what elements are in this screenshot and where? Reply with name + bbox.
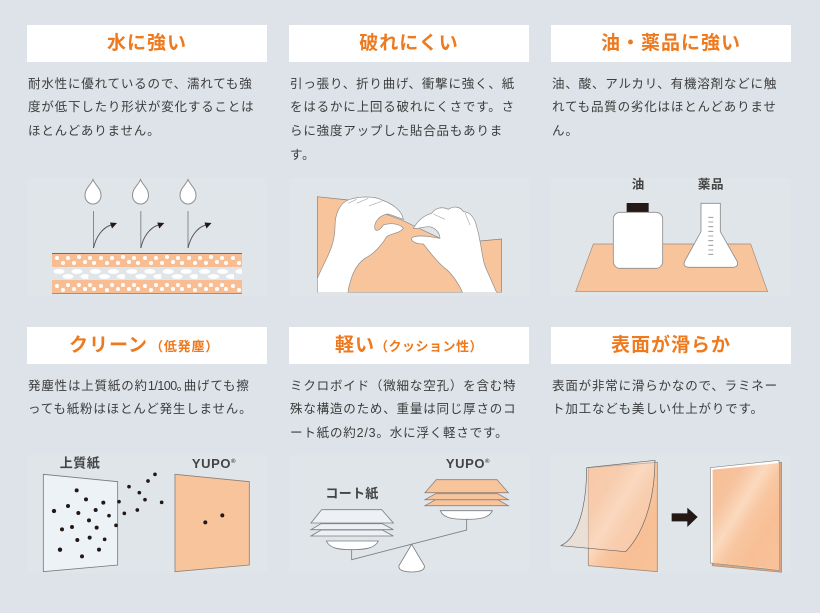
label: oil: 油 (632, 176, 644, 192)
heading: light (289, 327, 529, 364)
label: woodfree paper: 上質紙 (60, 456, 100, 470)
text: light: ミクロボイド（微細な空孔）を含む特 (290, 378, 516, 392)
text: clean: 発塵性は上質紙の約1/100。曲げても擦 (28, 378, 250, 392)
text: oil and chemical resistant: れても品質の劣化はほとんどありませ (552, 100, 777, 114)
heading: oil and chemical resistant (551, 25, 791, 62)
illustration: hands tearing sheet (317, 196, 502, 292)
label: coated paper: コート紙 (325, 486, 379, 501)
heading: tear resistant: 破れにくい (359, 33, 459, 54)
heading: water resistant (27, 25, 267, 62)
text: smooth surface: 表面が非常に滑らかなので、ラミネー (552, 378, 778, 392)
text: tear resistant: をはるかに上回る破れにくさです。さ (290, 100, 515, 114)
label: YUPO: YUPO (192, 456, 231, 471)
illustration: lamination before and after (551, 455, 791, 573)
finger creases (348, 198, 470, 225)
torn sheet (317, 197, 502, 292)
illustration: balance comparing coated paper and YUPO (289, 455, 529, 573)
text: water resistant: 度が低下したり形状が変化することは (28, 100, 254, 114)
text: smooth surface (552, 378, 778, 416)
woodfree paper sheet (43, 474, 118, 572)
heading: light: 軽い（クッション性） (335, 335, 483, 356)
text: light: ート紙の約2/3。水に浮く軽さです。 (290, 426, 508, 440)
text: tear resistant (290, 76, 515, 162)
heading: clean (27, 327, 267, 364)
text: tear resistant: す。 (290, 148, 315, 162)
coated paper stack (311, 510, 393, 550)
heading: smooth surface: 表面が滑らか (611, 335, 731, 356)
balance beam and fulcrum (352, 519, 467, 572)
heading: clean: クリーン（低発塵） (69, 335, 219, 356)
text: clean (28, 378, 252, 416)
text: water resistant (28, 76, 254, 138)
bottle (613, 203, 663, 268)
water drops and arrows (85, 180, 212, 248)
heading: oil and chemical resistant: 油・薬品に強い (601, 33, 741, 54)
text: tear resistant: 引っ張り、折り曲げ、衝撃に強く、紙 (290, 76, 515, 90)
text: tear resistant: らに強度アップした貼合品もありま (290, 124, 503, 138)
heading: water resistant: 水に強い (107, 33, 187, 54)
laminated sheet (710, 460, 782, 572)
text: smooth surface: ト加工なども美しい仕上がりです。 (552, 402, 764, 416)
text: light: 殊な構造のため、重量は同じ厚さのコ (290, 402, 516, 416)
left hand (317, 197, 403, 294)
arrow (672, 508, 698, 527)
label: YUPO: ® (485, 458, 490, 465)
label: chemicals: 薬品 (698, 176, 724, 192)
label: YUPO: ® (231, 458, 236, 465)
illustration: oil bottle and chemical flask on sheet (551, 178, 791, 296)
heading: tear resistant (289, 25, 529, 62)
sheet with peeling film (561, 460, 657, 572)
illustration: water droplets bouncing off layered sheet (27, 178, 267, 296)
text: oil and chemical resistant (552, 76, 777, 138)
flask (684, 203, 738, 267)
label: YUPO: YUPO (446, 456, 485, 471)
YUPO sheet (175, 474, 249, 572)
heading: smooth surface (551, 327, 791, 364)
sheet (576, 244, 768, 292)
right hand (412, 207, 497, 294)
YUPO stack (425, 480, 508, 519)
text: oil and chemical resistant: ん。 (552, 124, 579, 138)
text: water resistant: ほとんどありません。 (28, 124, 160, 138)
text: water resistant: 耐水性に優れているので、濡れても強 (28, 76, 253, 90)
text: oil and chemical resistant: 油、酸、アルカリ、有機溶剤などに触 (552, 76, 777, 90)
layered sheet cross-section (52, 254, 242, 294)
dust particles (52, 472, 224, 558)
text: light (290, 378, 516, 440)
text: clean: っても紙粉はほとんど発生しません。 (28, 402, 252, 416)
illustration: dust comparison between paper and YUPO (27, 455, 267, 573)
